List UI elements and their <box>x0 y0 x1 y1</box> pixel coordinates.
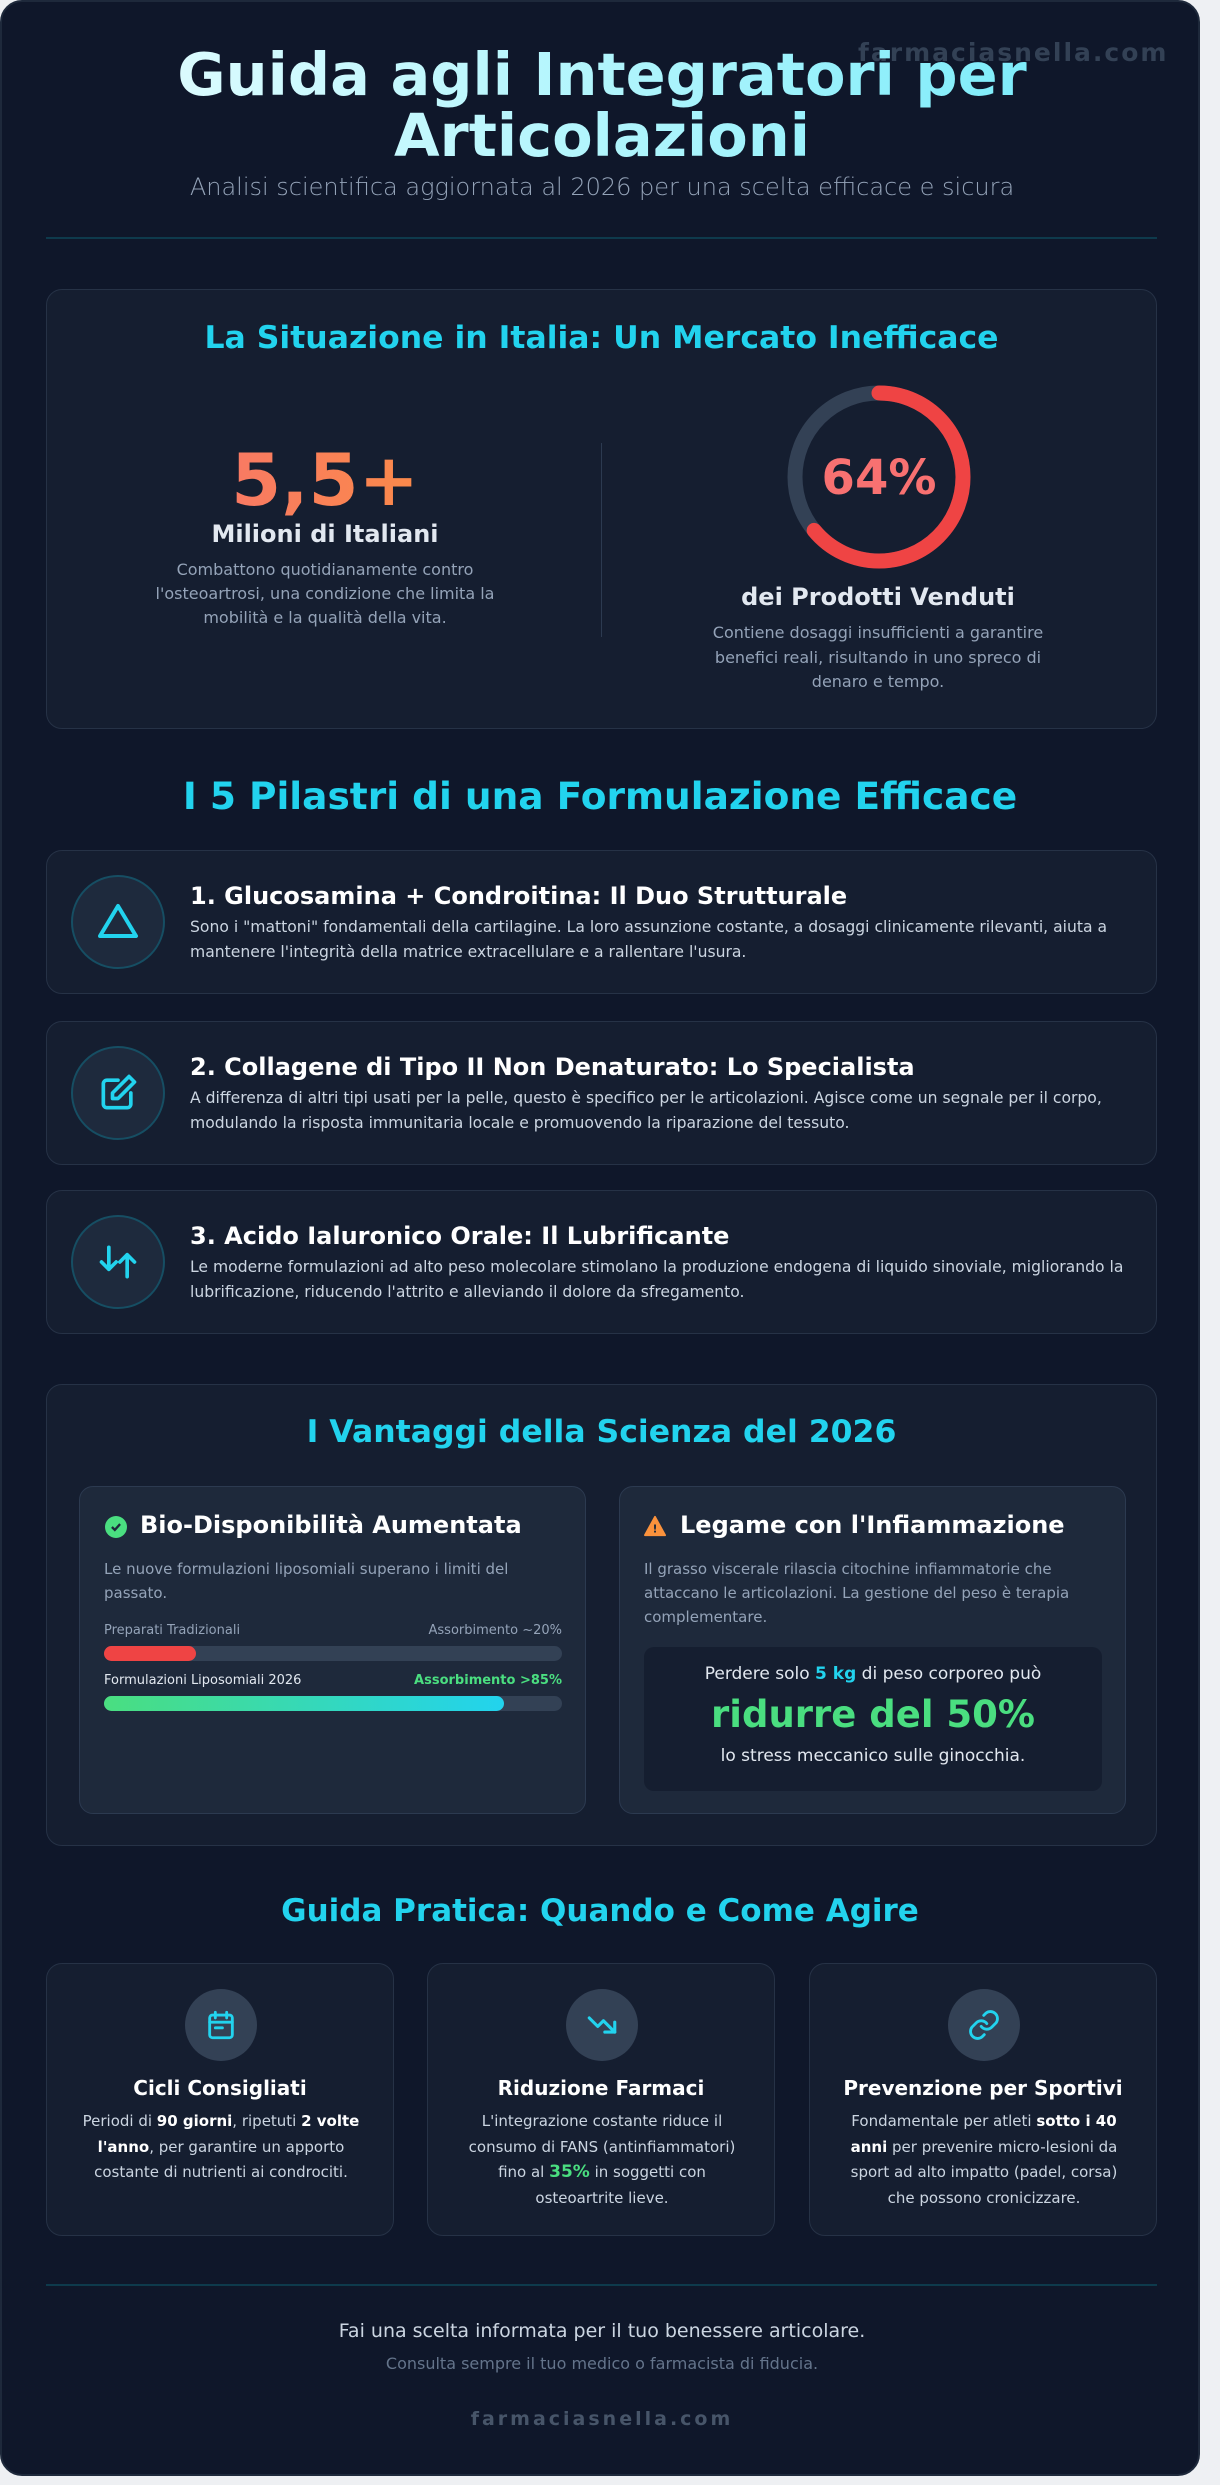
icon: warning <box>644 1516 666 1536</box>
panel: situazione italia <box>46 289 1157 729</box>
icon: warning: ! <box>652 1522 658 1535</box>
bar chart: absorption: Assorbimento >85% <box>414 1673 562 1688</box>
stat: prodotti venduti: dei Prodotti Venduti <box>741 583 1015 611</box>
card: pillar 3: Le moderne formulazioni ad alto peso molecolare stimolano la produzione endogena di liquido sinoviale, migliorando la lubrificazione, riducendo l'attrito e alleviando il dolore da sfregamento. <box>190 1258 1123 1301</box>
heading: situazione: La Situazione in Italia: Un Mercato Inefficace <box>204 320 999 356</box>
subpanel: biodisponibilità: Le nuove formulazioni liposomiali superano i limiti del passato. <box>104 1560 508 1602</box>
card: pillar 2: 2. Collagene di Tipo II Non Denaturato: Lo Specialista <box>190 1053 915 1081</box>
card: cicli: Cicli Consigliati <box>133 2076 307 2100</box>
card: farmaci <box>427 1963 775 2236</box>
stat: prodotti venduti: Contiene dosaggi insufficienti a garantire benefici reali, risultando in uno spreco di denaro e tempo. <box>713 623 1043 691</box>
icon: link <box>948 1989 1020 2061</box>
icon: triangle <box>71 875 165 969</box>
bar chart: absorption: Preparati Tradizionali <box>104 1623 240 1638</box>
watermark: farmaciasnella.com <box>858 38 1168 67</box>
stat: 5,5+: Milioni di Italiani <box>211 520 439 548</box>
subpanel: infiammazione <box>619 1486 1126 1814</box>
icon: edit <box>71 1046 165 1140</box>
stat: 5,5+: Combattono quotidianamente contro l'osteoartrosi, una condizione che limita la mobilità e la qualità della vita. <box>156 560 494 627</box>
stat: 5,5+ <box>156 438 494 627</box>
card: farmaci: fino al 35% in soggetti con osteoartrite lieve. <box>498 2162 706 2206</box>
title: Articolazioni <box>394 101 810 170</box>
bar chart: absorption: Assorbimento ~20% <box>429 1623 562 1638</box>
card: farmaci: L'integrazione costante riduce il consumo di FANS (antinfiammatori) <box>469 2112 735 2156</box>
card: cicli <box>46 1963 394 2236</box>
card: sportivi: che possono cronicizzare. <box>888 2188 1080 2206</box>
stat: prodotti venduti <box>713 583 1043 691</box>
stat: 5,5+: 5,5+ <box>231 438 419 522</box>
card: pillar 1 <box>46 850 1157 994</box>
chart: donut 64%: 64% <box>822 450 936 506</box>
icon: trend down <box>566 1989 638 2061</box>
footer text <box>339 2320 865 2373</box>
card: pillar 3: 3. Acido Ialuronico Orale: Il Lubrificante <box>190 1222 729 1250</box>
card: sportivi: Prevenzione per Sportivi <box>843 2076 1123 2100</box>
callout: 5kg: lo stress meccanico sulle ginocchia. <box>721 1746 1025 1766</box>
icon: arrows <box>71 1215 165 1309</box>
panel: vantaggi scienza <box>46 1384 1157 1846</box>
icon: check <box>105 1516 127 1538</box>
title: Guida agli Integratori per <box>177 40 1027 109</box>
card: sportivi: Fondamentale per atleti sotto i 40 anni per prevenire micro-lesioni da sport ad alto impatto (padel, corsa) <box>851 2112 1117 2181</box>
card: farmaci: Riduzione Farmaci <box>498 2076 704 2100</box>
footer brand: farmaciasnella.com <box>471 2408 733 2430</box>
footer text: Consulta sempre il tuo medico o farmacista di fiducia. <box>386 2354 818 2373</box>
subpanel: infiammazione: Il grasso viscerale rilascia citochine infiammatorie che attaccano le articolazioni. La gestione del peso è terapia complementare. <box>644 1560 1069 1626</box>
card: cicli: Periodi di 90 giorni, ripetuti 2 volte l'anno, per garantire un apporto costante di nutrienti ai condrociti. <box>83 2112 359 2181</box>
callout: 5kg: ridurre del 50% <box>711 1693 1035 1736</box>
callout: 5kg: Perdere solo 5 kg di peso corporeo può <box>705 1664 1041 1684</box>
subtitle: Analisi scientifica aggiornata al 2026 per una scelta efficace e sicura <box>190 173 1014 201</box>
heading: 5 pilastri: I 5 Pilastri di una Formulazione Efficace <box>183 774 1017 818</box>
heading: vantaggi: I Vantaggi della Scienza del 2026 <box>307 1414 896 1450</box>
card: sportivi <box>809 1963 1157 2236</box>
card: pillar 2: A differenza di altri tipi usati per la pelle, questo è specifico per le articolazioni. Agisce come un segnale per il corpo, modulando la risposta immunitaria locale e promuovendo la riparazione del tessuto. <box>190 1089 1102 1132</box>
card: pillar 1: Sono i "mattoni" fondamentali della cartilagine. La loro assunzione costante, a dosaggi clinicamente rilevanti, aiuta a mantenere l'integrità della matrice extracellulare e a rallentare l'usura. <box>190 918 1107 961</box>
footer text: Fai una scelta informata per il tuo benessere articolare. <box>339 2320 865 2342</box>
card: pillar 1: 1. Glucosamina + Condroitina: Il Duo Strutturale <box>190 882 847 910</box>
subpanel: biodisponibilità: Bio-Disponibilità Aumentata <box>140 1511 522 1539</box>
heading: guida pratica: Guida Pratica: Quando e Come Agire <box>281 1893 919 1929</box>
title <box>2 44 1202 166</box>
subpanel: biodisponibilità <box>79 1486 586 1814</box>
icon: calendar <box>185 1989 257 2061</box>
bar chart: absorption: Formulazioni Liposomiali 2026 <box>104 1673 301 1688</box>
card: pillar 3 <box>46 1190 1157 1334</box>
subpanel: infiammazione: Legame con l'Infiammazione <box>680 1511 1065 1539</box>
card: pillar 2 <box>46 1021 1157 1165</box>
chart: donut 64% <box>788 386 970 568</box>
bar chart: absorption <box>104 1623 562 1711</box>
callout: 5kg <box>644 1647 1102 1791</box>
